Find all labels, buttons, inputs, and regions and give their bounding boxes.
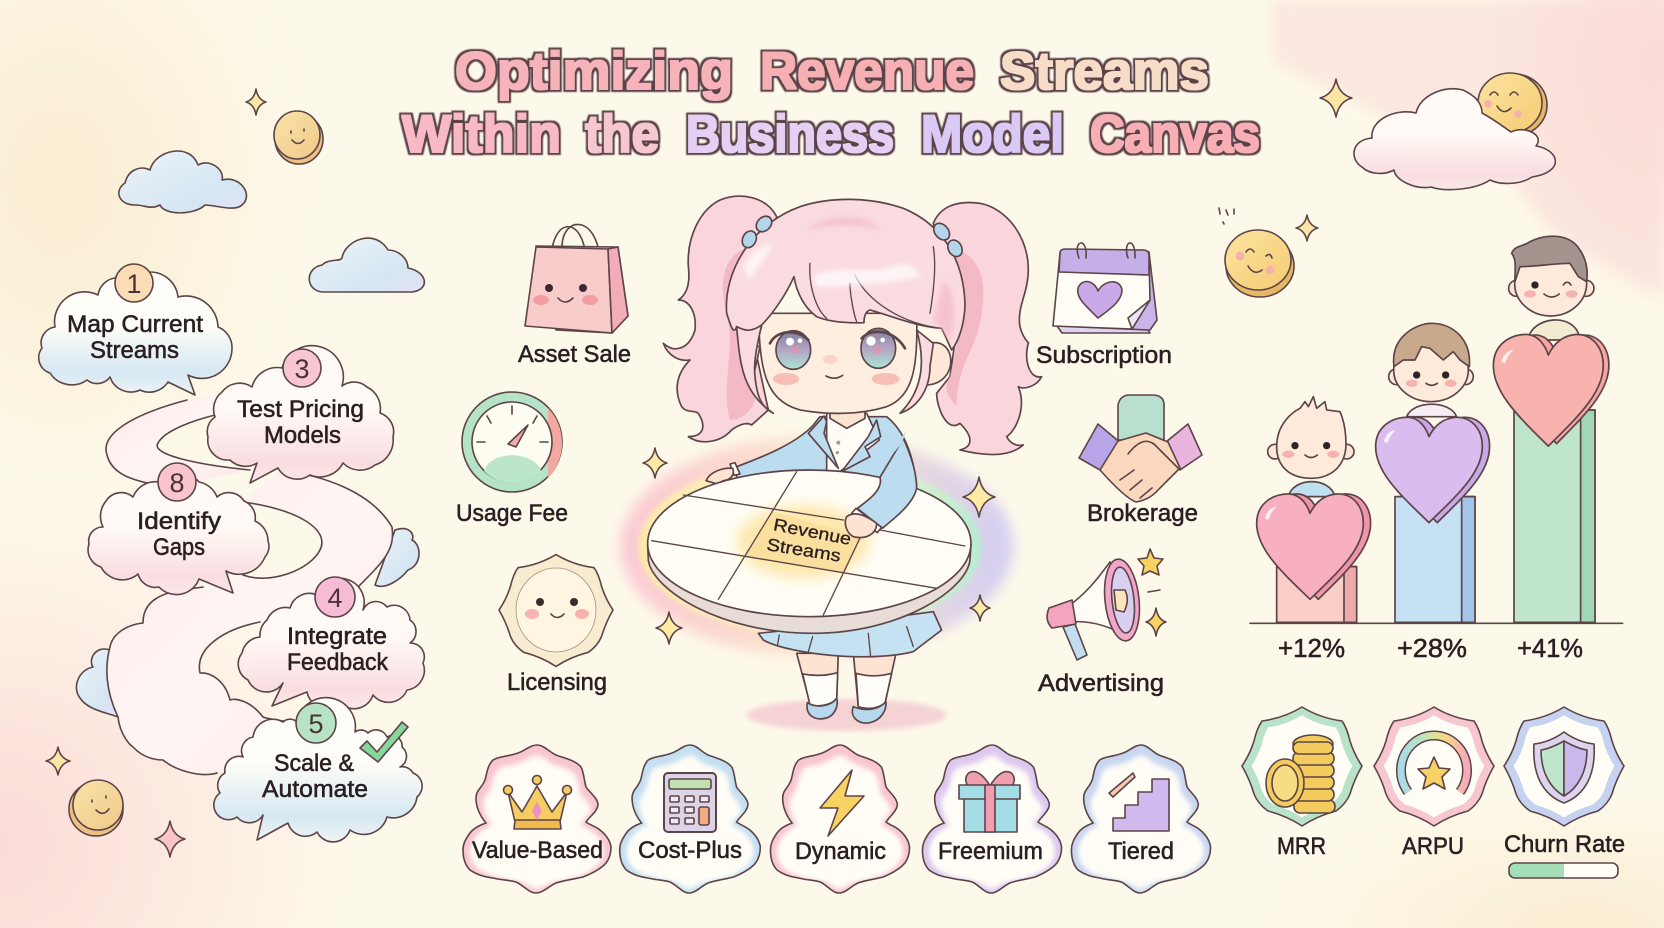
KPI: ARPU (1374, 707, 1494, 826)
value labels (1278, 633, 1583, 663)
pink cloud top right (1354, 89, 1555, 190)
badge: Cost-Plus: Cost-Plus (638, 837, 742, 864)
canvas table (648, 430, 971, 633)
step 2: Identify Gaps: 8 (169, 468, 185, 498)
title: Canvas (1090, 105, 1260, 164)
badge: Tiered: Tiered (1108, 838, 1174, 865)
label: ARPU: ARPU (1402, 833, 1464, 860)
girl's head and pigtails (663, 196, 1042, 454)
title: Model (921, 105, 1064, 164)
icon: crown (504, 776, 572, 829)
title: Revenue (760, 42, 974, 101)
step 3: Test Pricing Models: Models (264, 422, 341, 449)
icon: shield (1534, 732, 1594, 803)
bar +41% with adult (1493, 236, 1609, 622)
highlighted Revenue Streams cell (745, 512, 861, 573)
panel: winding path with five steps (39, 264, 424, 842)
step 5: Scale & Automate: Automate (262, 776, 368, 803)
step 2: Identify Gaps (88, 463, 269, 595)
swirling road (76, 392, 419, 775)
title: Optimizing (455, 42, 733, 101)
badge: Cost-Plus (620, 745, 760, 893)
central character with canvas table (620, 196, 1042, 731)
chart baseline (1250, 621, 1623, 626)
legs, skirt and blazer (706, 412, 942, 723)
KPI: MRR (1242, 707, 1362, 826)
sparkles (46, 79, 1352, 857)
title: Streams (1000, 42, 1209, 101)
coin: middle right (1225, 230, 1294, 297)
icon: coin stack (1266, 735, 1335, 813)
label: Asset Sale: Asset Sale (518, 341, 631, 368)
value labels: +41% (1517, 633, 1583, 663)
step 1: Map Current Streams: Map Current (67, 311, 203, 338)
label: MRR: MRR (1277, 833, 1326, 860)
step 5: Scale & Automate: 5 (308, 709, 324, 739)
icon: handshake (1079, 395, 1202, 502)
step 1: Map Current Streams (39, 264, 232, 395)
canvas table: Revenue (772, 514, 853, 549)
panel: pricing strategy badges (463, 745, 1211, 893)
step 1: Map Current Streams: Streams (90, 337, 179, 364)
value labels: +28% (1397, 633, 1467, 663)
panel: revenue stream types (456, 224, 1202, 697)
step 1: Map Current Streams: 1 (126, 269, 142, 299)
icon: gauge (462, 392, 562, 492)
step 2: Identify Gaps: Gaps (153, 534, 205, 561)
step 4: Integrate Feedback: Feedback (287, 649, 389, 676)
badge: Dynamic: Dynamic (795, 838, 886, 865)
label: Advertising: Advertising (1038, 670, 1164, 697)
title: Within (402, 105, 561, 164)
KPI: Churn Rate (1504, 707, 1624, 826)
badge: Value-Based: Value-Based (472, 837, 603, 864)
panel: growth bar chart (1250, 236, 1623, 663)
icon: licensing seal (499, 555, 613, 666)
badge: Freemium (922, 745, 1062, 893)
label: Brokerage: Brokerage (1087, 500, 1198, 527)
icon: calendar (1053, 243, 1157, 333)
hair ties (740, 213, 965, 259)
badge: Dynamic (770, 745, 910, 893)
step 5: Scale & Automate (214, 698, 422, 842)
eyes (770, 328, 905, 369)
label: Churn Rate: Churn Rate (1504, 831, 1625, 858)
badge: Tiered (1071, 745, 1211, 893)
icon: purple stairs (1109, 773, 1169, 831)
step 4: Integrate Feedback: 4 (327, 583, 343, 613)
step 3: Test Pricing Models: Test Pricing (237, 396, 364, 423)
panel: KPI badges (1242, 707, 1625, 878)
icon: shopping bag (525, 224, 628, 333)
bar +12% with baby (1257, 397, 1371, 622)
label: Usage Fee: Usage Fee (456, 500, 568, 527)
step 5: Scale & Automate: Scale & (274, 750, 354, 777)
bar +28% with child (1376, 323, 1490, 622)
glow sparkles (643, 448, 995, 644)
canvas table: Streams (765, 534, 843, 566)
value labels: +12% (1278, 633, 1345, 663)
coin top right behind cloud (1478, 73, 1547, 136)
coin: bottom left (69, 780, 123, 836)
rainbow glow (620, 437, 1013, 731)
icon: gift box (959, 772, 1020, 832)
step 4: Integrate Feedback: Integrate (287, 623, 387, 650)
label: Licensing: Licensing (507, 669, 607, 696)
step 3: Test Pricing Models: 3 (294, 354, 310, 384)
icon: megaphone (1047, 549, 1166, 660)
icon: rainbow meter and star (1401, 735, 1467, 792)
step 2: Identify Gaps: Identify (137, 508, 221, 535)
icon: lightning bolt (820, 770, 864, 836)
hair cap and bangs (726, 199, 965, 350)
title: Business (686, 105, 894, 164)
churn progress bar (1509, 863, 1618, 878)
coin: top left (274, 111, 323, 164)
title: the (585, 105, 659, 164)
step 4: Integrate Feedback (238, 577, 424, 709)
icon: check mark (360, 722, 408, 762)
step 3: Test Pricing Models (207, 346, 394, 483)
badge: Freemium: Freemium (938, 838, 1043, 865)
decorative clouds (119, 151, 424, 292)
badge: Value-Based (463, 745, 611, 893)
title (402, 42, 1260, 164)
label: Subscription: Subscription (1036, 342, 1172, 369)
icon: calculator (664, 773, 716, 832)
